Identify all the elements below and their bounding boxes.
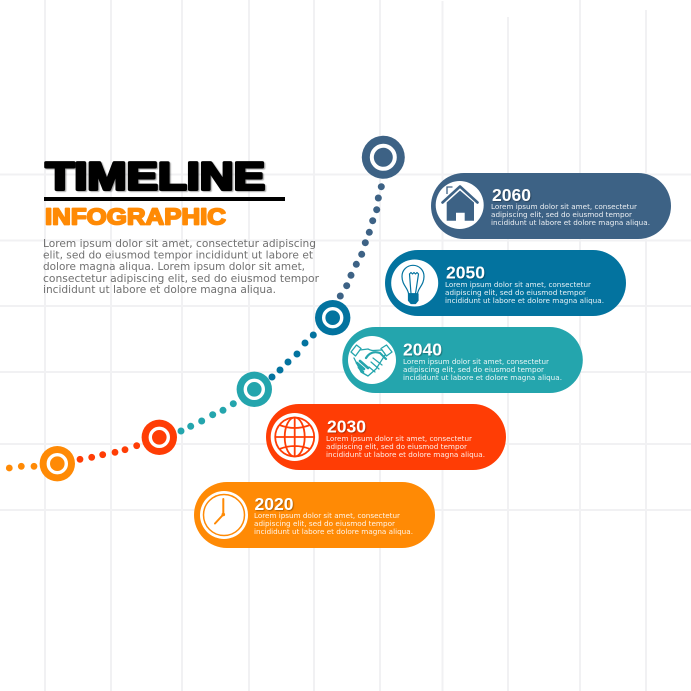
icon: globe: [275, 418, 314, 456]
description 2040: Lorem ipsum dolor sit amet, consectetur: [403, 358, 549, 366]
panel: 2020: [194, 482, 435, 548]
subtitle: INFOGRAPHIC: INFOGRAPHIC: [45, 203, 226, 229]
node 2060: [362, 136, 405, 179]
title underline: [44, 197, 285, 201]
description 2050: Lorem ipsum dolor sit amet, consectetur: [445, 281, 591, 289]
description 2050: incididunt ut labore et dolore magna aliqua.: [445, 297, 604, 305]
intro paragraph: incididunt ut labore et dolore magna aliqua.: [43, 284, 276, 296]
year 2020: 2020: [254, 494, 294, 514]
description 2060: adipiscing elit, sed do eiusmod tempor: [491, 211, 632, 219]
icon: handshake: [351, 345, 392, 376]
description 2030: [326, 435, 485, 459]
intro paragraph: Lorem ipsum dolor sit amet, consectetur adipiscing: [43, 238, 316, 250]
description 2020: incididunt ut labore et dolore magna aliqua.: [254, 528, 413, 536]
year 2060: 2060: [492, 185, 531, 205]
panel: 2060: [431, 173, 671, 239]
description 2020: adipiscing elit, sed do eiusmod tempor: [254, 520, 395, 528]
year 2040: 2040: [403, 340, 442, 360]
description 2030: adipiscing elit, sed do eiusmod tempor: [326, 443, 467, 451]
intro paragraph: elit, sed do eiusmod tempor incididunt ut labore et: [43, 250, 313, 262]
intro paragraph: consectetur adipiscing elit, sed do eiusmod tempor: [43, 273, 320, 285]
description 2050: [445, 281, 604, 305]
description 2040: incididunt ut labore et dolore magna aliqua.: [403, 374, 562, 382]
node 2050: [315, 300, 350, 335]
panel: 2030: [266, 404, 506, 470]
description 2040: [403, 358, 562, 382]
description 2020: [254, 512, 413, 536]
panel: 2040: [342, 327, 583, 393]
dotted timeline path: [6, 183, 385, 471]
node 2040: [237, 372, 272, 407]
description 2020: Lorem ipsum dolor sit amet, consectetur: [254, 512, 400, 520]
description 2040: adipiscing elit, sed do eiusmod tempor: [403, 366, 544, 374]
title: TIMELINE: TIMELINE: [46, 155, 265, 198]
icon: house: [442, 186, 478, 221]
icon: light bulb: [402, 265, 424, 304]
description 2060: incididunt ut labore et dolore magna aliqua.: [491, 219, 650, 227]
intro paragraph: [43, 238, 320, 296]
description 2030: incididunt ut labore et dolore magna aliqua.: [326, 451, 485, 459]
node 2030: [142, 420, 177, 455]
node 2020: [40, 446, 75, 481]
description 2060: [491, 203, 650, 227]
intro paragraph: dolore magna aliqua. Lorem ipsum dolor sit amet,: [43, 261, 305, 273]
panel: 2050: [385, 250, 626, 316]
icon: clock: [204, 494, 244, 536]
year 2050: 2050: [446, 262, 485, 282]
description 2060: Lorem ipsum dolor sit amet, consectetur: [491, 203, 637, 211]
description 2050: adipiscing elit, sed do eiusmod tempor: [445, 289, 586, 297]
year 2030: 2030: [327, 417, 366, 437]
description 2030: Lorem ipsum dolor sit amet, consectetur: [326, 435, 472, 443]
